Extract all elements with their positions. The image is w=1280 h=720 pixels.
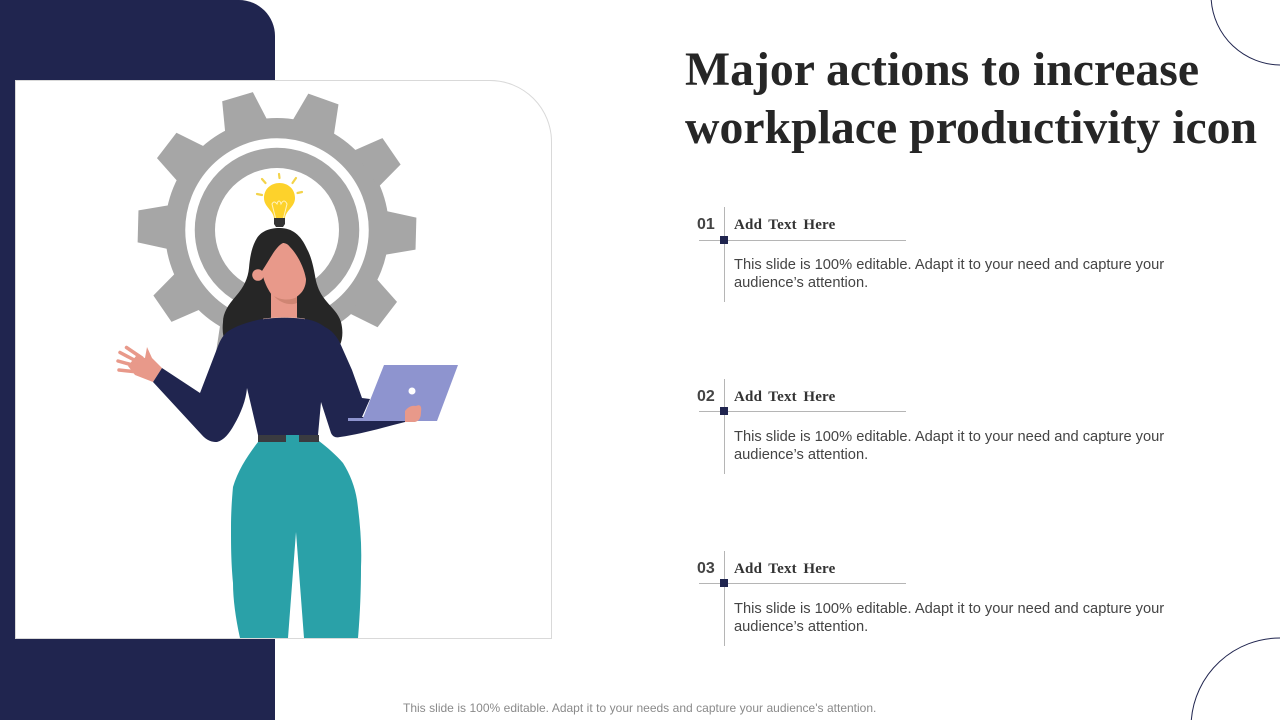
footer note: This slide is 100% editable. Adapt it to your needs and capture your audience's attention. — [403, 701, 876, 715]
woman's raised hand — [118, 347, 162, 382]
neckline — [263, 318, 305, 319]
title: Major actions to increase — [685, 43, 1199, 96]
item 02 — [697, 379, 1164, 474]
item body text: This slide is 100% editable. Adapt it to your need and capture your — [734, 429, 1164, 445]
hand on laptop — [405, 405, 421, 422]
number: 03 — [697, 560, 715, 577]
item 01 — [697, 207, 1164, 302]
icon: light bulb — [257, 174, 302, 227]
title — [685, 43, 1257, 154]
item heading: Add Text Here — [734, 561, 836, 577]
marker square — [720, 407, 728, 415]
sweater — [153, 319, 405, 442]
laptop — [348, 365, 458, 421]
decorative corner arc top right — [1211, 0, 1280, 65]
marker square — [720, 236, 728, 244]
item body text: This slide is 100% editable. Adapt it to your need and capture your — [734, 601, 1164, 617]
item body text: audience’s attention. — [734, 619, 868, 635]
belt — [258, 435, 319, 442]
face and neck — [252, 243, 306, 319]
item 03 — [697, 551, 1164, 646]
item heading: Add Text Here — [734, 389, 836, 405]
decorative corner arc bottom right — [1191, 638, 1280, 720]
number: 02 — [697, 388, 715, 405]
number: 01 — [697, 216, 715, 233]
item body text — [734, 257, 1164, 291]
item body text: audience’s attention. — [734, 275, 868, 291]
item body text — [734, 601, 1164, 635]
pants — [231, 441, 361, 638]
item body text: audience’s attention. — [734, 447, 868, 463]
item heading: Add Text Here — [734, 217, 836, 233]
title: workplace productivity icon — [685, 101, 1257, 154]
item body text — [734, 429, 1164, 463]
white illustration panel — [15, 80, 552, 639]
navy background panel — [0, 0, 275, 720]
item body text: This slide is 100% editable. Adapt it to your need and capture your — [734, 257, 1164, 273]
marker square — [720, 579, 728, 587]
icon: gear — [137, 90, 417, 370]
hair — [223, 228, 342, 345]
